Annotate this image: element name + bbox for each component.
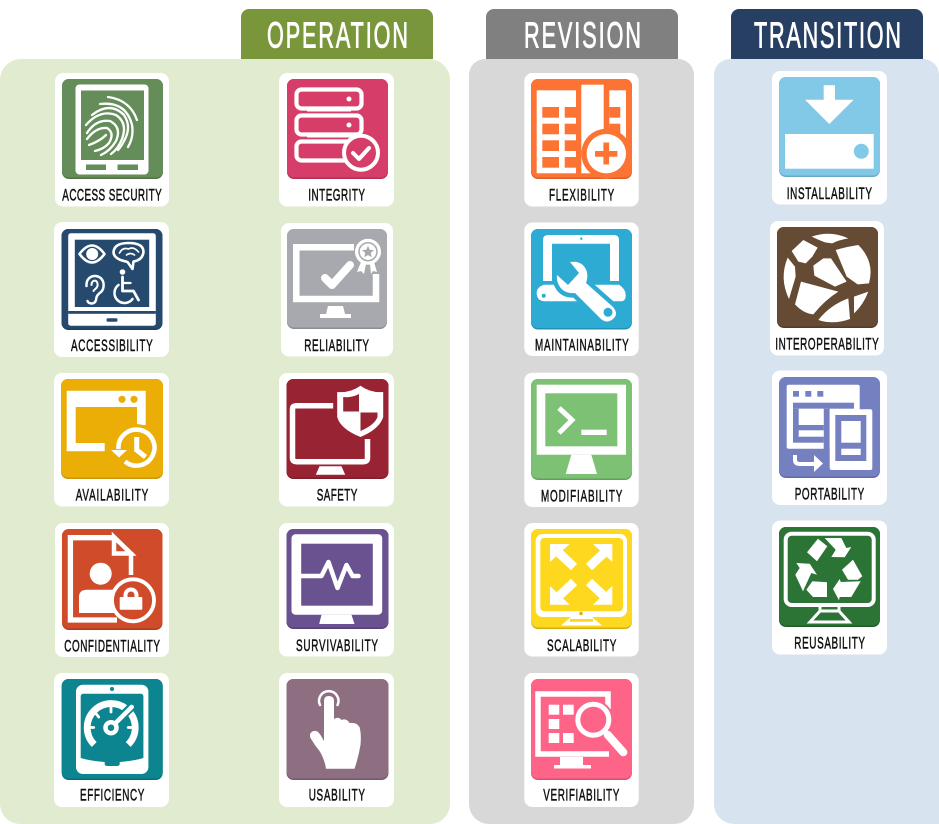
heading: transition: TRANSITION: [754, 16, 901, 56]
icon: grid with plus: [531, 79, 632, 179]
heading: operation: [241, 9, 433, 59]
card: confidentiality: [55, 523, 169, 657]
label: reusability: REUSABILITY: [794, 634, 865, 652]
label: survivability: SURVIVABILITY: [296, 636, 378, 655]
label: usability: USABILITY: [309, 786, 365, 804]
icon: magnifier monitor: [531, 679, 632, 780]
card: accessibility: [54, 222, 169, 357]
icon: download drive: [779, 77, 880, 177]
card: installability: [772, 71, 887, 204]
transition panel background: [714, 59, 939, 824]
label: verifiability: VERIFIABILITY: [543, 786, 619, 804]
card: scalability: [524, 523, 639, 656]
icon: window clock: [61, 379, 163, 479]
label: installability: INSTALLABILITY: [787, 184, 872, 203]
card: efficiency: [54, 673, 169, 807]
label: access security: ACCESS SECURITY: [62, 186, 162, 204]
label: safety: SAFETY: [317, 486, 357, 504]
icon: speedometer tablet: [62, 679, 163, 780]
icon: locked profile document: [62, 529, 162, 630]
label: scalability: SCALABILITY: [547, 636, 616, 655]
heading: revision: REVISION: [524, 16, 641, 56]
icon: touch hand: [286, 679, 388, 780]
card: access security: [55, 73, 169, 206]
icon: recycle monitor: [779, 527, 880, 627]
label: interoperability: INTEROPERABILITY: [775, 335, 879, 353]
icon: terminal monitor: [531, 379, 632, 480]
label: availability: AVAILABILITY: [76, 486, 148, 504]
icon: heartbeat monitor: [286, 529, 388, 629]
label: modifiability: MODIFIABILITY: [541, 487, 622, 505]
icon: expand monitor: [531, 529, 632, 629]
icon: server check: [287, 79, 388, 179]
card: reusability: [772, 520, 887, 654]
icon: fingerprint tablet: [62, 79, 163, 179]
heading: revision: [486, 9, 678, 59]
revision panel background: [469, 59, 694, 824]
card: integrity: [279, 73, 394, 206]
card: verifiability: [524, 673, 639, 807]
label: confidentiality: CONFIDENTIALITY: [64, 637, 160, 655]
card: modifiability: [524, 373, 639, 507]
card: flexibility: [524, 73, 639, 206]
icon: shield monitor: [286, 379, 388, 479]
card: safety: [279, 373, 394, 506]
card: maintainability: [524, 222, 639, 356]
card: usability: [279, 673, 394, 807]
label: flexibility: FLEXIBILITY: [549, 186, 614, 204]
heading: operation: OPERATION: [267, 16, 408, 56]
card: survivability: [279, 523, 394, 656]
label: efficiency: EFFICIENCY: [80, 786, 144, 804]
card: interoperability: [770, 221, 884, 356]
icon: certified monitor: [287, 229, 387, 329]
card: portability: [772, 370, 887, 505]
label: accessibility: ACCESSIBILITY: [71, 336, 153, 355]
icon: accessibility tablet: [62, 229, 162, 330]
heading: transition: [731, 9, 923, 59]
label: reliability: RELIABILITY: [304, 336, 369, 355]
operation panel background: [0, 59, 450, 824]
panel: operation: [0, 9, 450, 824]
label: maintainability: MAINTAINABILITY: [535, 336, 629, 354]
panel: transition: [714, 9, 939, 824]
icon: network globe: [777, 227, 878, 328]
icon: laptop wrench: [531, 229, 632, 330]
icon: window to phone: [779, 377, 880, 478]
label: integrity: INTEGRITY: [308, 186, 365, 204]
label: portability: PORTABILITY: [795, 485, 864, 503]
panel: revision: [469, 9, 694, 824]
card: reliability: [281, 223, 393, 356]
card: availability: [54, 373, 169, 506]
